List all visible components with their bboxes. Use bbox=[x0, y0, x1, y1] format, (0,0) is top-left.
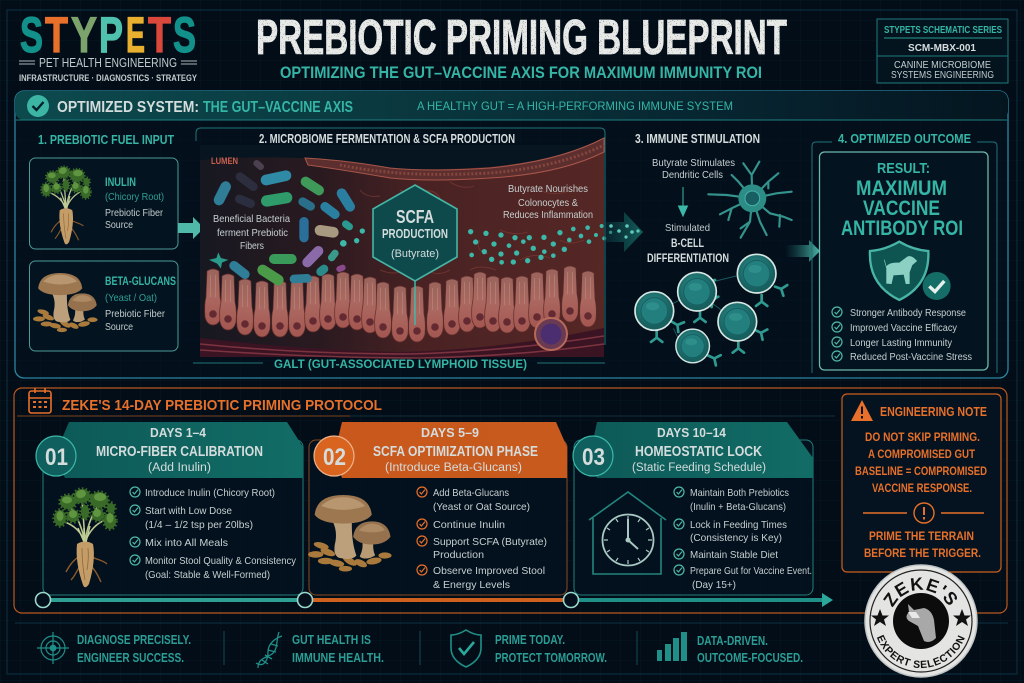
arrow: tissue to immune bbox=[604, 212, 643, 252]
checklist: Support SCFA (Butyrate) bbox=[433, 536, 547, 548]
section 3: immune stimulation bbox=[635, 132, 792, 365]
bacteria text: Fibers bbox=[240, 240, 264, 252]
checklist: Monitor Stool Quality & Consistency bbox=[145, 555, 297, 567]
benefits list bbox=[832, 307, 972, 363]
card heading: DAYS 1–4 bbox=[150, 426, 206, 440]
logo: STYPETS: S bbox=[20, 7, 43, 63]
note motto: PRIME THE TERRAIN bbox=[869, 531, 974, 543]
checklist bbox=[417, 487, 547, 591]
benefits list: Improved Vaccine Efficacy bbox=[850, 322, 958, 334]
seal: Zeke's expert selection bbox=[864, 564, 978, 678]
card: inulin: (Chicory Root) bbox=[105, 191, 164, 203]
card heading bbox=[373, 426, 538, 474]
logo: STYPETS: E bbox=[126, 7, 145, 63]
seal: Zeke's expert selection: ZEKE'S bbox=[883, 577, 957, 608]
logo: STYPETS: P bbox=[99, 7, 123, 63]
logo: STYPETS: T bbox=[148, 7, 171, 63]
note heading: ENGINEERING NOTE bbox=[880, 404, 987, 419]
checklist: (Consistency is Key) bbox=[690, 532, 782, 544]
checklist: Observe Improved Stool bbox=[433, 565, 545, 577]
footer: prime today: PROTECT TOMORROW. bbox=[495, 651, 607, 665]
checklist: (Yeast or Oat Source) bbox=[433, 501, 530, 513]
icon: mushrooms bbox=[308, 495, 392, 572]
bacteria text: Beneficial Bacteria bbox=[213, 213, 290, 225]
arrow: fuel to fermentation bbox=[178, 217, 204, 239]
checklist bbox=[674, 487, 812, 591]
benefits list: Stronger Antibody Response bbox=[850, 307, 966, 319]
panel heading: OPTIMIZED SYSTEM: bbox=[57, 99, 199, 116]
card: inulin: INULIN bbox=[105, 177, 136, 189]
icon: clock house bbox=[589, 492, 666, 574]
footer: data-driven bbox=[657, 632, 803, 665]
dendritic text: Butyrate Stimulates bbox=[652, 157, 735, 169]
text: B-cell: Stimulated bbox=[665, 222, 710, 234]
subtitle: OPTIMIZING THE GUT–VACCINE AXIS FOR MAXIMUM IMMUNITY ROI bbox=[280, 63, 762, 82]
card: days 10-14 bbox=[573, 422, 813, 595]
text: B-cell: B-CELL bbox=[671, 236, 704, 250]
card: beta-glucans: Prebiotic Fiber bbox=[105, 308, 165, 320]
checklist: (Inulin + Beta-Glucans) bbox=[690, 501, 786, 513]
immune cell bbox=[535, 318, 567, 350]
card: beta-glucans: Source bbox=[105, 321, 133, 333]
panel: optimized system bbox=[15, 91, 1008, 378]
card heading: MICRO-FIBER CALIBRATION bbox=[96, 444, 263, 460]
bacteria bbox=[210, 163, 350, 280]
panel heading accent: THE GUT–VACCINE AXIS bbox=[203, 99, 353, 116]
text: B-cell: DIFFERENTIATION bbox=[647, 253, 729, 265]
note text: A COMPROMISED GUT bbox=[868, 449, 975, 461]
footer: gut health: GUT HEALTH IS bbox=[292, 633, 371, 647]
footer: diagnose precisely: DIAGNOSE PRECISELY. bbox=[77, 633, 191, 647]
badge 03 bbox=[573, 436, 613, 476]
logo: STYPETS: INFRASTRUCTURE · DIAGNOSTICS · STRATEGY bbox=[19, 73, 198, 84]
badge 01 bbox=[36, 436, 76, 476]
card heading bbox=[632, 426, 766, 474]
note text: BASELINE = COMPROMISED bbox=[855, 466, 987, 478]
schematic series box bbox=[877, 19, 1008, 83]
text: B-cell bbox=[647, 222, 729, 265]
schematic series box: SCM-MBX-001 bbox=[908, 42, 976, 54]
epithelial cells bbox=[205, 266, 596, 342]
card heading: DAYS 5–9 bbox=[421, 426, 479, 440]
checklist: Production bbox=[433, 549, 484, 561]
seal: Zeke's expert selection: EXPERT SELECTION bbox=[877, 634, 965, 668]
down arrow bbox=[678, 187, 688, 216]
footer: data-driven: OUTCOME-FOCUSED. bbox=[697, 651, 803, 665]
card: inulin: Prebiotic Fiber bbox=[105, 207, 163, 219]
divider icon bbox=[863, 503, 984, 523]
title: PREBIOTIC PRIMING BLUEPRINT bbox=[256, 11, 787, 65]
card heading: (Add Inulin) bbox=[148, 462, 211, 474]
checklist: Add Beta-Glucans bbox=[433, 487, 509, 499]
card: days 1-4 bbox=[36, 422, 303, 595]
card heading: SCFA OPTIMIZATION PHASE bbox=[373, 444, 538, 460]
note motto: BEFORE THE TRIGGER. bbox=[864, 548, 981, 560]
footer: diagnose precisely: ENGINEER SUCCESS. bbox=[77, 651, 184, 665]
panel: 14-day protocol bbox=[14, 388, 1007, 613]
section 2: fermentation bbox=[193, 128, 612, 371]
note text: VACCINE RESPONSE. bbox=[872, 483, 972, 495]
schematic series box: CANINE MICROBIOME bbox=[894, 60, 991, 71]
card heading: (Static Feeding Schedule) bbox=[632, 462, 766, 474]
badge 02 bbox=[314, 436, 354, 476]
logo: STYPETS: PET HEALTH ENGINEERING bbox=[39, 56, 177, 70]
schematic series box: SYSTEMS ENGINEERING bbox=[891, 70, 994, 81]
card: beta-glucans bbox=[30, 261, 178, 351]
footer: data-driven: DATA-DRIVEN. bbox=[697, 634, 768, 648]
SCFA hexagon: SCFA bbox=[396, 207, 434, 227]
SCFA particles bbox=[340, 224, 612, 265]
B cells bbox=[635, 254, 787, 365]
lumen label: LUMEN bbox=[211, 156, 238, 167]
bacteria text bbox=[213, 213, 290, 252]
heading: 1. PREBIOTIC FUEL INPUT bbox=[38, 133, 174, 147]
footer: prime today bbox=[451, 630, 607, 667]
checklist: & Energy Levels bbox=[433, 579, 510, 591]
heading: 4. OPTIMIZED OUTCOME bbox=[838, 132, 971, 146]
icon: calendar bbox=[29, 388, 51, 413]
card heading: (Introduce Beta-Glucans) bbox=[385, 462, 522, 474]
card: beta-glucans: BETA-GLUCANS bbox=[105, 276, 176, 288]
logo: STYPETS: S bbox=[173, 7, 196, 63]
result box: ANTIBODY ROI bbox=[841, 217, 963, 240]
footer: diagnose precisely bbox=[37, 632, 191, 665]
logo: STYPETS: T bbox=[45, 7, 68, 63]
checklist: Lock in Feeding Times bbox=[690, 519, 787, 531]
footer: gut health: IMMUNE HEALTH. bbox=[292, 651, 384, 665]
butyrate text: Butyrate Nourishes bbox=[508, 183, 588, 195]
result box bbox=[820, 152, 988, 370]
tissue illustration bbox=[200, 138, 604, 358]
butyrate text: Colonocytes & bbox=[518, 197, 578, 209]
checklist: Continue Inulin bbox=[433, 519, 505, 531]
arrow: immune to outcome bbox=[785, 240, 820, 262]
note text bbox=[855, 432, 987, 495]
badge 03: 03 bbox=[582, 444, 605, 471]
engineering note bbox=[842, 394, 1001, 572]
heading: 3. IMMUNE STIMULATION bbox=[635, 132, 760, 146]
card: beta-glucans: (Yeast / Oat) bbox=[105, 292, 157, 304]
result box: VACCINE bbox=[863, 197, 940, 220]
checklist: Mix into All Meals bbox=[145, 537, 228, 549]
checklist bbox=[130, 487, 297, 581]
card: inulin: Source bbox=[105, 219, 133, 231]
section 1: prebiotic fuel input bbox=[30, 133, 178, 351]
card: days 5-9 bbox=[308, 422, 567, 595]
dendritic text bbox=[652, 157, 735, 181]
icon: check badge bbox=[27, 95, 49, 117]
footer: gut health bbox=[224, 631, 637, 668]
icon: warning bbox=[851, 400, 873, 421]
heading: ZEKE'S 14-DAY PREBIOTIC PRIMING PROTOCOL bbox=[62, 397, 382, 414]
note motto bbox=[864, 531, 981, 560]
butyrate text bbox=[503, 183, 593, 221]
frame bbox=[193, 128, 605, 363]
checklist: Maintain Stable Diet bbox=[690, 549, 778, 561]
footer: prime today: PRIME TODAY. bbox=[495, 633, 565, 647]
GALT label: GALT (GUT-ASSOCIATED LYMPHOID TISSUE) bbox=[274, 357, 527, 371]
checklist: (Day 15+) bbox=[692, 579, 736, 591]
benefits list: Reduced Post-Vaccine Stress bbox=[850, 351, 972, 363]
checklist: (Goal: Stable & Well-Formed) bbox=[145, 569, 270, 581]
SCFA hexagon: (Butyrate) bbox=[391, 248, 439, 260]
section 4: optimized outcome bbox=[812, 132, 997, 373]
timeline bbox=[36, 592, 833, 608]
result box: MAXIMUM bbox=[856, 177, 947, 200]
checklist: Start with Low Dose bbox=[145, 505, 232, 517]
SCFA hexagon: PRODUCTION bbox=[382, 226, 448, 241]
dendritic text: Dendritic Cells bbox=[662, 169, 723, 181]
logo: STYPETS bbox=[19, 7, 198, 84]
bacteria text: ferment Prebiotic bbox=[217, 227, 288, 239]
icon: shield with dog bbox=[870, 242, 951, 300]
checklist: (1/4 – 1/2 tsp per 20lbs) bbox=[145, 519, 253, 531]
logo: STYPETS: Y bbox=[71, 7, 97, 63]
card heading: DAYS 10–14 bbox=[657, 426, 726, 440]
card heading bbox=[96, 426, 263, 474]
icon: chicory bbox=[54, 489, 116, 587]
benefits list: Longer Lasting Immunity bbox=[850, 337, 953, 349]
checklist: Maintain Both Prebiotics bbox=[690, 487, 789, 499]
heading: 2. MICROBIOME FERMENTATION & SCFA PRODUCTION bbox=[259, 132, 515, 146]
result box: RESULT: bbox=[877, 160, 930, 177]
note text: DO NOT SKIP PRIMING. bbox=[865, 432, 980, 444]
checklist: Introduce Inulin (Chicory Root) bbox=[145, 487, 275, 499]
badge 02: 02 bbox=[323, 444, 346, 471]
frame bbox=[812, 142, 997, 373]
checklist: Prepare Gut for Vaccine Event. bbox=[690, 565, 812, 577]
butyrate text: Reduces Inflammation bbox=[503, 209, 593, 221]
SCFA hexagon bbox=[373, 185, 457, 325]
badge 01: 01 bbox=[45, 444, 68, 471]
dendritic cell bbox=[708, 162, 792, 238]
tagline: A HEALTHY GUT = A HIGH-PERFORMING IMMUNE SYSTEM bbox=[417, 99, 733, 113]
card: inulin bbox=[30, 158, 178, 249]
card heading: HOMEOSTATIC LOCK bbox=[635, 444, 762, 460]
